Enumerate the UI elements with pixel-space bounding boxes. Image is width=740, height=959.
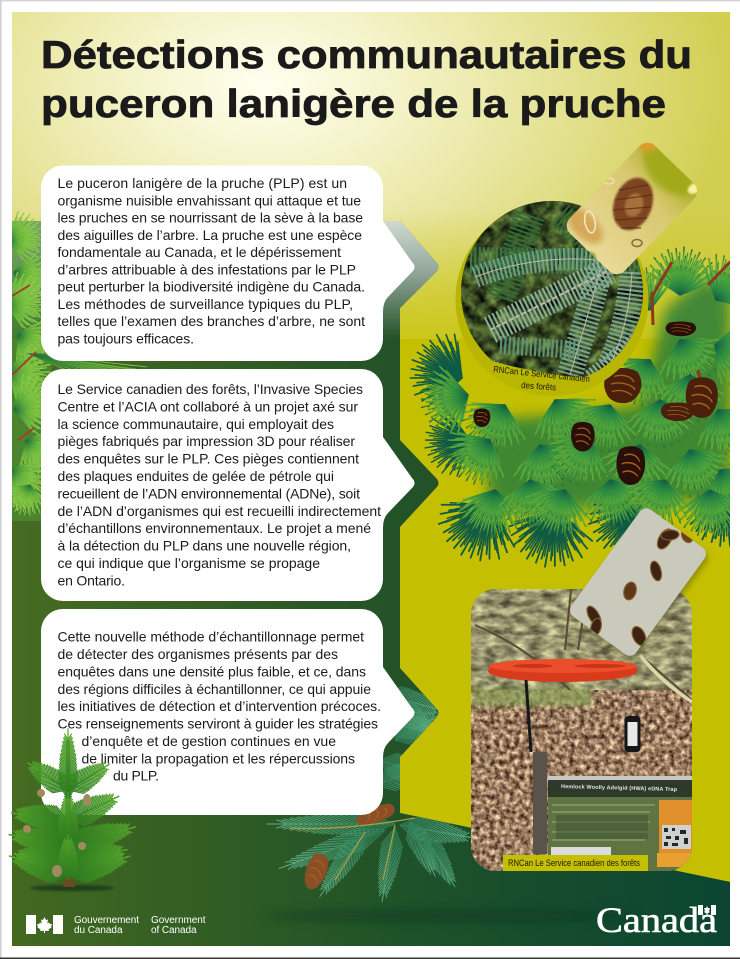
pine branches: left edge xyxy=(12,211,148,521)
title: puceron lanigère de la pruche xyxy=(41,83,666,126)
bubble 2 text: Centre et l’ACIA ont collaboré à un projet axé sur xyxy=(58,398,358,414)
bubble 3 text: de limiter la propagation et les répercussions xyxy=(82,750,355,766)
bubble 2 text: pièges fabriqués par impression 3D pour réaliser xyxy=(58,433,355,449)
small hemlock tree xyxy=(6,729,139,891)
photo caption: forest trap: RNCan Le Service canadien des forêts xyxy=(508,858,640,869)
bubble 3 xyxy=(41,609,414,815)
pine branch: bottom centre xyxy=(268,683,476,904)
icon: flag symbol xyxy=(26,915,63,934)
bubble 2 text: Le Service canadien des forêts, l’Invasive Species xyxy=(58,381,363,397)
title: Détections communautaires du xyxy=(41,34,692,77)
bubble 2 text: à la détection du PLP dans une nouvelle région, xyxy=(58,538,351,554)
bubble 3 text: du PLP. xyxy=(113,768,159,784)
bubble 2 text xyxy=(58,381,381,588)
Canada wordmark: Canada xyxy=(596,900,717,940)
bubble 1 text xyxy=(58,175,365,346)
bubble 2 text: de l’ADN d’organismes qui est recueilli indirectement xyxy=(58,503,381,519)
title xyxy=(41,34,692,126)
photo: close-up of adelgid xyxy=(566,142,697,274)
bubble 1 text: pas toujours efficaces. xyxy=(58,330,194,346)
bubble 2 text: recueillent de l’ADN environnemental (ADNe), soit xyxy=(58,485,360,501)
circle photo caption: des forêts xyxy=(521,380,557,392)
icon: wordmark flag xyxy=(698,905,716,915)
bubble 3 text: Ces renseignements serviront à guider les stratégies xyxy=(58,716,378,732)
bubble 1 text: Les méthodes de surveillance typiques du PLP, xyxy=(58,296,353,312)
post xyxy=(533,752,547,854)
Government of Canada signature: Government xyxy=(151,915,206,926)
bubble 3 text: enquêtes dans une densité plus faible, et ce, dans xyxy=(58,663,366,679)
red trap plate xyxy=(488,659,638,682)
bubble 3 text: d’enquête et de gestion continues en vue xyxy=(82,733,336,749)
bubble 1 text: organisme nuisible envahissant qui attaque et tue xyxy=(58,192,361,208)
bubble 1 text: telles que l’examen des branches d’arbre, ne sont xyxy=(58,313,365,329)
bubble 2 text: en Ontario. xyxy=(58,572,125,588)
bubble 2 text: d’échantillons environnementaux. Le projet a mené xyxy=(58,520,371,536)
bubble 2 text: des plaques enduites de gelée de pétrole qui xyxy=(58,468,334,484)
bubble 2 text: ce qui indique que l’organisme se propage xyxy=(58,555,320,571)
bubble 1 text: d’arbres attribuable à des infestations par le PLP xyxy=(58,261,356,277)
Government of Canada signature xyxy=(26,915,206,936)
bubble 1 text: fondamentale au Canada, et le dépérissement xyxy=(58,244,341,260)
bubble 3 text: Cette nouvelle méthode d’échantillonnage permet xyxy=(58,629,364,645)
Government of Canada signature: du Canada xyxy=(74,925,123,936)
bubble 2 text: la science communautaire, qui employait des xyxy=(58,416,334,432)
bubble 3 text: les initiatives de détection et d’intervention précoces. xyxy=(58,698,381,714)
Government of Canada signature: Gouvernement xyxy=(74,915,139,926)
bubble 1 text: des aiguilles de l’arbre. La pruche est une espèce xyxy=(58,227,362,243)
photo: infested hemlock in circle xyxy=(456,201,648,410)
photo caption: forest trap xyxy=(503,855,648,871)
bubble 2 text: des enquêtes sur le PLP. Ces pièges contiennent xyxy=(58,451,359,467)
sign: Hemlock Woolly Adelgid (HWA) eDNA Trap xyxy=(561,784,678,793)
bubble 3 text: des régions difficiles à échantillonner, ce qui appuie xyxy=(58,681,371,697)
dark green arrow band xyxy=(12,221,730,946)
bubble 1 text: peut perturber la biodiversité indigène du Canada. xyxy=(58,278,365,294)
bubble 3 text xyxy=(58,629,381,784)
photo: sticky plate with aphids xyxy=(570,508,710,662)
bubble 1 xyxy=(41,166,414,361)
photo: trap in the forest xyxy=(471,589,692,871)
pine branches: right cluster xyxy=(399,241,740,576)
bubble 1 text: Le puceron lanigère de la pruche (PLP) est un xyxy=(58,175,347,191)
bubble 1 text: les pruches en se nourrissant de la sève à la base xyxy=(58,210,363,226)
bubble 2 xyxy=(41,369,414,601)
sign xyxy=(548,776,692,871)
bubble 3 text: de détecter des organismes présents par des xyxy=(58,646,338,662)
Government of Canada signature: of Canada xyxy=(151,925,197,936)
circle photo caption: RNCan Le Service canadien xyxy=(493,364,590,384)
hanging tag xyxy=(624,680,640,752)
branches and cones xyxy=(473,262,730,485)
